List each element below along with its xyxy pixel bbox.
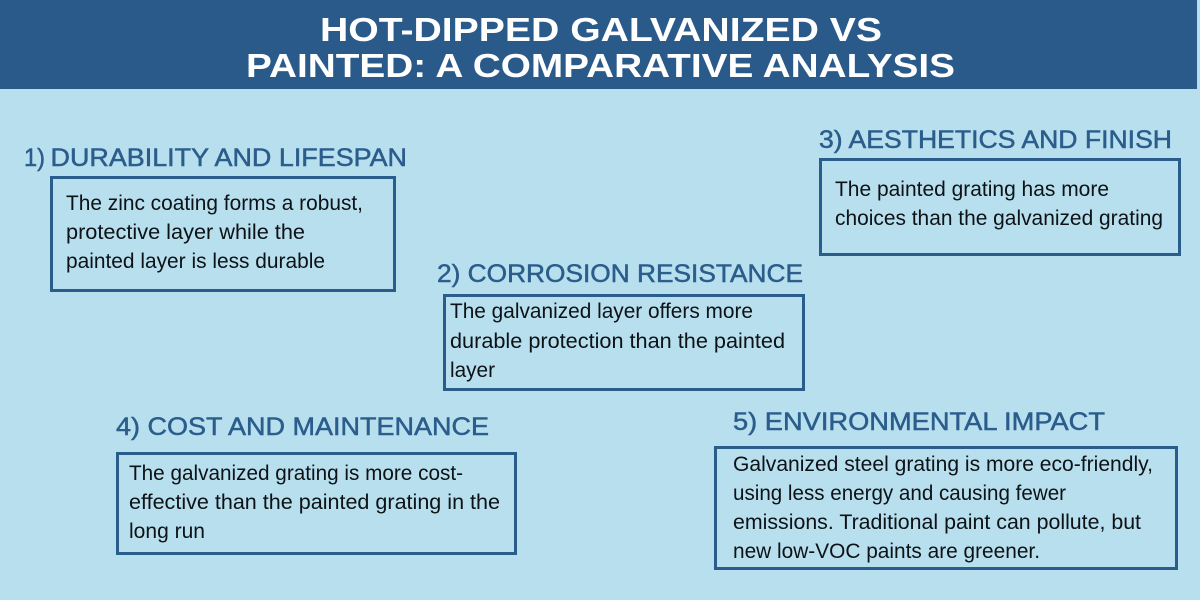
text block: environmental: emissions. Traditional paint can pollute, but <box>733 511 1141 534</box>
text block: cost: The galvanized grating is more cost- <box>129 462 463 485</box>
text block: environmental: using less energy and causing fewer <box>733 482 1066 505</box>
panel: corrosion resistance <box>437 260 804 390</box>
text block: corrosion: layer <box>450 359 495 382</box>
text block: durability: painted layer is less durable <box>66 250 325 273</box>
panel: durability and lifespan <box>24 144 407 290</box>
text block: durability: protective layer while the <box>66 221 305 244</box>
text block: durability: The zinc coating forms a robust, <box>66 192 363 215</box>
text block: environmental: Galvanized steel grating is more eco-friendly, <box>733 453 1153 476</box>
text block: environmental <box>733 453 1153 563</box>
text block: aesthetics: The painted grating has more <box>835 178 1109 201</box>
text block: environmental: new low-VOC paints are greener. <box>733 540 1040 563</box>
text block: corrosion <box>450 300 785 382</box>
text block: aesthetics: choices than the galvanized grating <box>835 207 1163 230</box>
box: environmental <box>716 448 1176 568</box>
text block: corrosion: The galvanized layer offers more <box>450 300 753 323</box>
heading: corrosion resistance: 2) CORROSION RESISTANCE <box>437 260 803 288</box>
text block: cost: effective than the painted grating in the <box>129 491 500 514</box>
header banner <box>0 0 1197 89</box>
heading: cost and maintenance: 4) COST AND MAINTENANCE <box>116 413 489 441</box>
panel: cost and maintenance <box>116 413 516 554</box>
title: PAINTED: A COMPARATIVE ANALYSIS <box>246 48 955 85</box>
text block: aesthetics <box>835 178 1163 230</box>
heading: environmental impact: 5) ENVIRONMENTAL IMPACT <box>733 408 1105 436</box>
panel: environmental impact <box>716 408 1176 568</box>
heading: durability and lifespan: DURABILITY AND LIFESPAN <box>50 144 407 172</box>
box: durability <box>52 178 394 290</box>
box: cost <box>118 454 516 554</box>
title <box>246 12 955 85</box>
text block: corrosion: durable protection than the painted <box>450 330 785 353</box>
heading: durability and lifespan: 1) <box>24 144 45 172</box>
text block: durability <box>66 192 363 273</box>
title: HOT-DIPPED GALVANIZED VS <box>320 12 882 49</box>
panel: aesthetics and finish <box>819 126 1180 254</box>
box: aesthetics <box>820 160 1180 254</box>
text block: cost <box>129 462 500 543</box>
text block: cost: long run <box>129 520 205 543</box>
box: corrosion <box>444 296 804 390</box>
heading: aesthetics and finish: 3) AESTHETICS AND FINISH <box>819 126 1172 154</box>
